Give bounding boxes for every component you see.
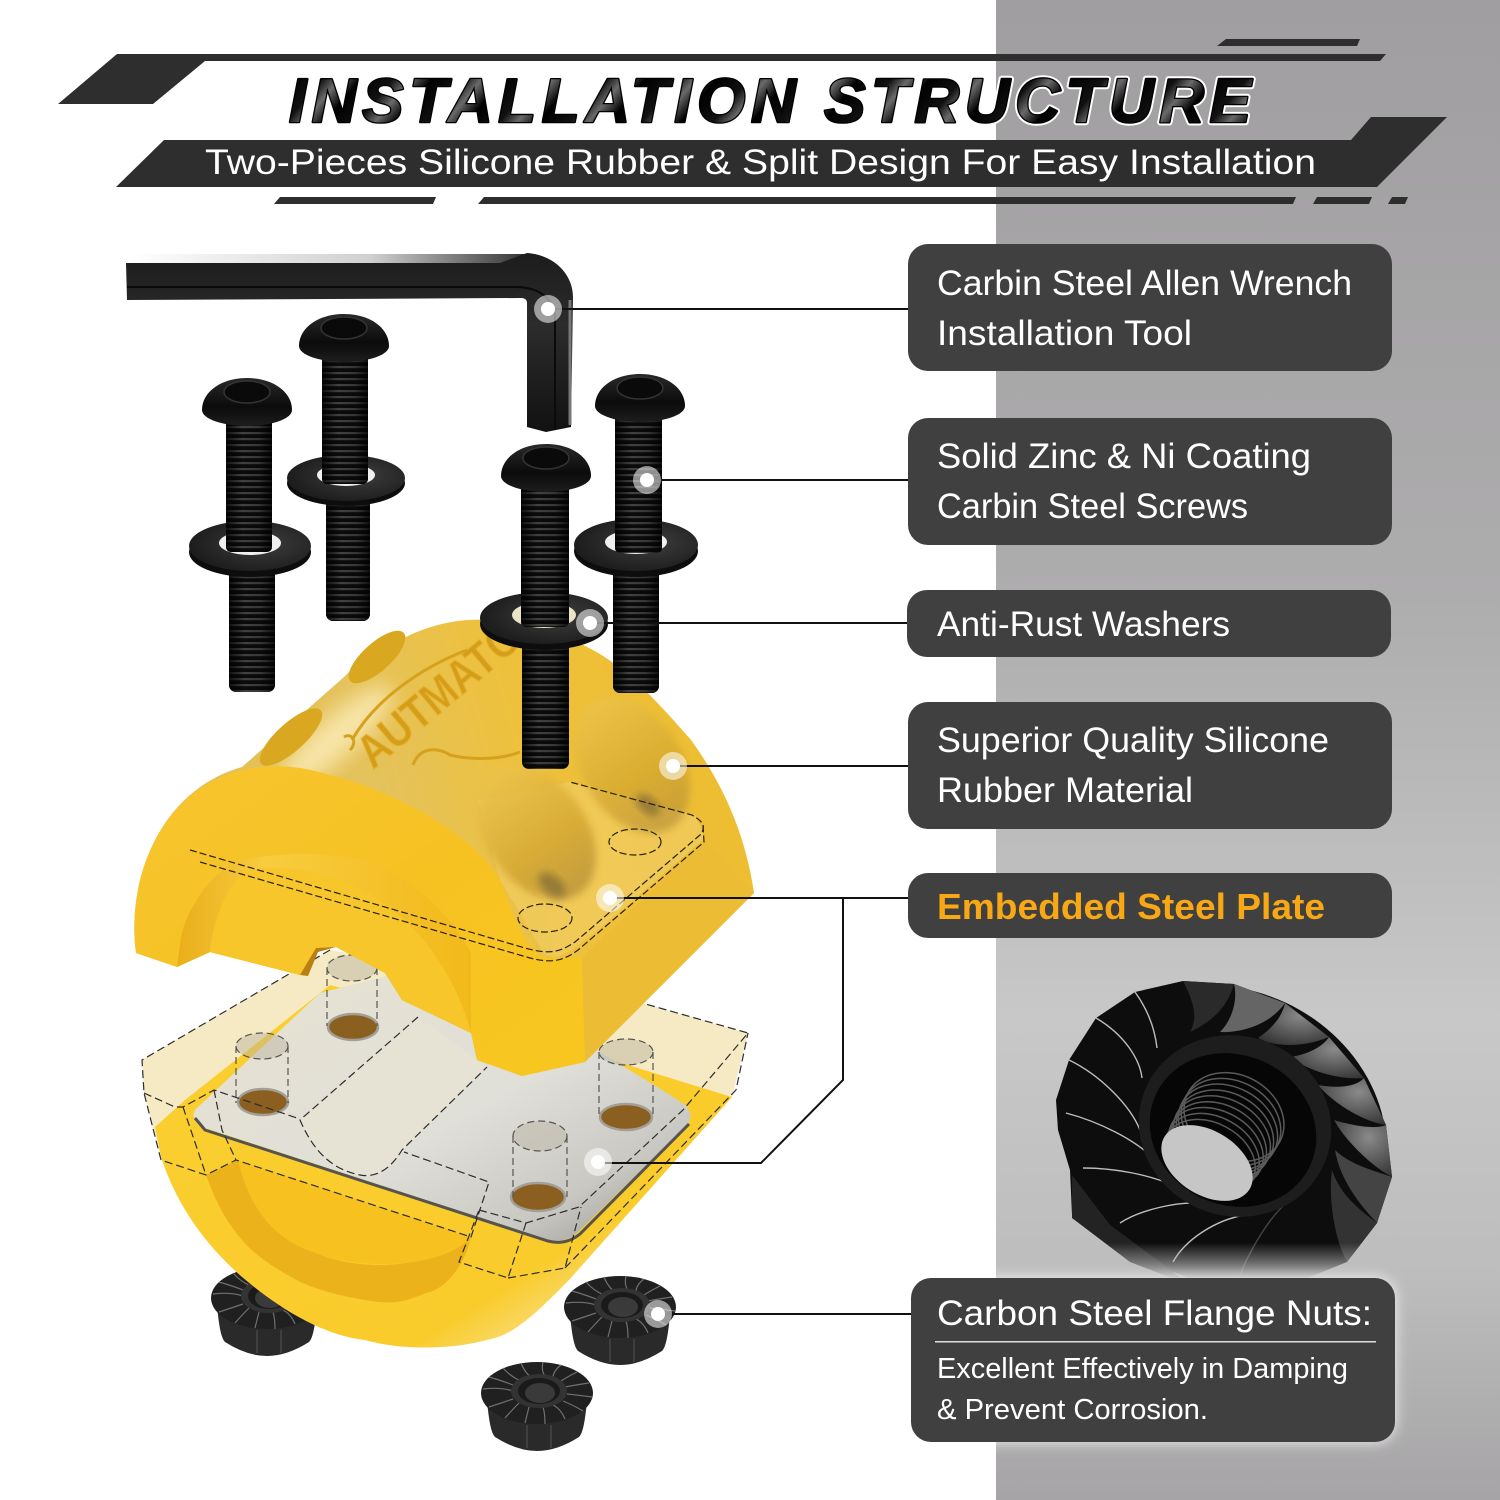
background: grey right panel	[996, 0, 1500, 1500]
top surface sheen	[266, 673, 404, 803]
arch leg shadow	[300, 947, 336, 976]
upper silicone half	[134, 612, 754, 1076]
label: washers: Anti-Rust Washers	[937, 605, 1230, 644]
top grooves	[252, 700, 330, 774]
plate holes	[238, 1014, 652, 1211]
screw: front	[480, 444, 608, 769]
flat panel	[478, 782, 705, 957]
icon: allen wrench	[126, 253, 573, 432]
lower silicone half	[142, 950, 748, 1348]
screw: rear middle	[287, 314, 405, 621]
hole cylinders	[236, 955, 653, 1197]
screw pockets	[454, 744, 620, 922]
label: embedded steel plate: Embedded Steel Plate	[937, 886, 1325, 927]
blades	[1183, 981, 1392, 1262]
label: flange nuts	[911, 1278, 1395, 1442]
threads	[1167, 1072, 1285, 1182]
leader lines	[548, 309, 911, 1314]
pocket shadows	[534, 868, 570, 902]
icon: large flange nut	[1056, 981, 1392, 1277]
nut: rear left	[211, 1267, 323, 1356]
embossed logo: AUTMATC	[346, 612, 529, 778]
nut: front	[481, 1362, 593, 1451]
label: screws: Carbin Steel Screws	[937, 487, 1248, 526]
arch band	[177, 854, 471, 1033]
banner frame shapes	[58, 39, 1447, 204]
logo swoosh	[344, 650, 520, 765]
title outline: INSTALLATION STRUCTURE	[289, 67, 1253, 136]
blade highlights	[1066, 992, 1290, 1275]
label: flange nuts: Excellent Effectively in Damping	[937, 1353, 1348, 1385]
callout dots	[534, 295, 687, 1328]
subtitle: Two-Pieces Silicone Rubber & Split Design For Easy Installation	[205, 143, 1316, 182]
plate rim	[195, 1118, 689, 1242]
arch recess	[210, 868, 471, 1033]
nut: front right	[564, 1276, 676, 1365]
nut hole	[1161, 1125, 1253, 1201]
label: allen wrench: Installation Tool	[937, 314, 1192, 353]
inner arch recess	[238, 1160, 471, 1264]
label: flange nuts: Carbon Steel Flange Nuts:	[937, 1294, 1372, 1333]
header banner	[58, 39, 1447, 204]
label pills	[907, 244, 1395, 1442]
right face	[582, 840, 754, 1062]
screw: rear left	[189, 378, 311, 692]
label: screws	[908, 418, 1392, 545]
label: silicone: Superior Quality Silicone	[937, 721, 1329, 760]
inner arch band	[206, 1160, 471, 1302]
front face	[134, 766, 585, 1076]
screw: rear right	[574, 374, 698, 693]
label: screws: Solid Zinc & Ni Coating	[937, 437, 1311, 476]
label: embedded steel plate	[908, 873, 1392, 938]
dashed plate outline	[190, 782, 704, 961]
solid yellow body	[155, 985, 732, 1348]
label: silicone	[908, 702, 1392, 829]
label: flange nuts: & Prevent Corrosion.	[937, 1394, 1208, 1426]
translucent upper section	[142, 950, 748, 1157]
label: allen wrench: Carbin Steel Allen Wrench	[937, 264, 1352, 303]
plate centre crease	[300, 1017, 487, 1176]
upper half silhouette / top surface	[134, 620, 754, 1076]
dashed contours	[142, 950, 748, 1278]
title: INSTALLATION STRUCTURE	[289, 67, 1253, 136]
label: washers	[907, 590, 1391, 657]
hub	[1138, 1035, 1331, 1217]
washer	[189, 521, 311, 577]
steel plate	[194, 960, 690, 1241]
flange underside	[1072, 1176, 1179, 1277]
label: allen wrench	[908, 244, 1392, 371]
label: silicone: Rubber Material	[937, 771, 1193, 810]
